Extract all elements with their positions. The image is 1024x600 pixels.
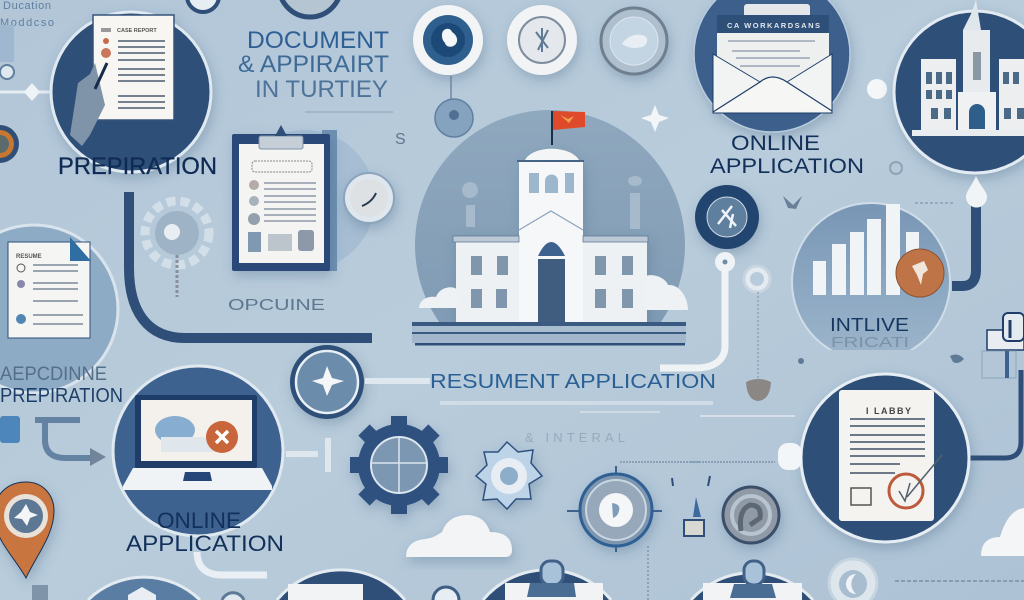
faint label: internal: & INTERAL — [525, 430, 625, 445]
top icon: blue badge — [413, 5, 483, 75]
dome backdrop — [415, 110, 685, 322]
label: intlive: INTLIVE — [830, 314, 909, 335]
document sheet — [93, 15, 174, 120]
flag — [552, 111, 585, 145]
icon: faint gear — [145, 201, 209, 297]
bottom row: partial circles with clips — [32, 559, 1024, 600]
orange coin — [896, 249, 944, 297]
icon: small ring and bird — [783, 162, 955, 209]
resume sheet — [8, 237, 91, 338]
heading: online application left: ONLINE — [157, 508, 241, 533]
envelope: CA WORKARDSANS — [727, 21, 820, 30]
icon: small figure — [648, 476, 710, 600]
medallion ornaments — [462, 176, 642, 229]
bars — [813, 204, 919, 295]
bottom clip small — [222, 593, 244, 600]
heading: online application right: ONLINE — [731, 132, 820, 155]
heading: online application right: APPLICATION — [710, 155, 864, 178]
envelope — [713, 4, 832, 113]
icon: light gear — [476, 442, 542, 509]
icon: cloud centre — [406, 515, 512, 557]
icon: right edge stamp — [982, 313, 1024, 378]
heading: reference preparation: PREPIRATION — [0, 385, 123, 407]
panel: bar chart circle: FRICATI — [831, 334, 909, 351]
top left faint text and connector — [0, 0, 54, 101]
connector: white stem with ring — [660, 252, 770, 368]
panel: preparation circle — [51, 12, 211, 172]
top icon: white ornament badge — [507, 5, 577, 75]
panel: bar chart circle — [792, 203, 950, 361]
heading: online application left: APPLICATION — [126, 531, 284, 556]
small marks — [620, 355, 964, 462]
icon: white bead by document — [778, 443, 802, 470]
panel: signed document circle — [801, 374, 969, 542]
dashed line — [895, 580, 1024, 582]
document sheet: CASE REPORT — [117, 28, 157, 34]
panel: city hall circle — [894, 0, 1024, 173]
city buildings — [912, 0, 1024, 136]
icon: large navy gear — [350, 416, 448, 514]
small ring — [433, 587, 459, 600]
title: IN TURTIEY — [255, 76, 388, 103]
panel: reference circle — [0, 225, 118, 393]
icon: cloud right — [981, 508, 1024, 556]
bottom circle 4 with clip — [691, 561, 813, 600]
title: & APPIRAIRT — [238, 51, 389, 78]
resume sheet: RESUME — [16, 254, 42, 260]
bottom small square — [32, 585, 48, 600]
icon: small seal — [435, 76, 473, 137]
heading: reference preparation: AEPCDINNE — [0, 364, 107, 385]
icon: fingerprint circle — [723, 487, 779, 543]
icon: gauge dial — [344, 173, 394, 223]
hand holding pen — [70, 63, 107, 146]
faint divider strokes — [440, 403, 713, 412]
building — [453, 149, 648, 322]
signed document — [839, 390, 942, 521]
heading: preparation: PREPIRATION — [58, 153, 217, 180]
icon: orange map pin — [0, 482, 54, 578]
icon: sparkle — [641, 105, 669, 132]
icon: dark ornament circle — [695, 185, 759, 249]
pendant: dotted line and weight — [746, 292, 771, 401]
heading: reference preparation — [0, 364, 123, 407]
connector: navy curve and white drop — [952, 176, 987, 286]
bottom circle 3 with clip — [483, 561, 611, 600]
signed document: I LABBY — [866, 406, 911, 416]
icon: white bead — [867, 79, 887, 99]
base steps — [412, 322, 686, 346]
icon: star badge — [290, 345, 364, 419]
top icon: grey ring badge — [601, 8, 667, 74]
title: DOCUMENT — [247, 27, 389, 54]
top left faint text and connector: Moddcso — [0, 17, 54, 29]
heading: online application left — [126, 508, 284, 556]
heading: online application right — [710, 132, 864, 178]
bottom circle 1 — [88, 577, 200, 600]
bottom circle 2 — [277, 570, 405, 600]
connector: white loop under application — [197, 552, 267, 575]
title — [238, 27, 393, 112]
panel: laptop online application — [113, 366, 283, 536]
connector: left grey loop — [0, 416, 106, 466]
panel: main building emblem — [412, 110, 688, 346]
icon: orange badge left edge — [0, 125, 19, 163]
icon: target dial — [567, 466, 662, 552]
label: resument application: RESUMENT APPLICATION — [430, 370, 716, 393]
connector: navy right lower — [968, 370, 1021, 458]
panel: clipboard checklist — [232, 125, 375, 271]
process path: navy connector — [129, 192, 372, 338]
laptop — [123, 395, 272, 490]
icon: faint symbol: S — [395, 131, 406, 148]
top edge partial icons — [187, 0, 341, 17]
bottom ring icon — [829, 559, 877, 600]
connector: white line to gear — [286, 381, 430, 472]
top left faint text and connector: Ducation — [3, 0, 51, 12]
panel: envelope circle — [694, 0, 850, 132]
label: document step: OPCUINE — [228, 297, 325, 314]
clouds — [419, 275, 688, 310]
